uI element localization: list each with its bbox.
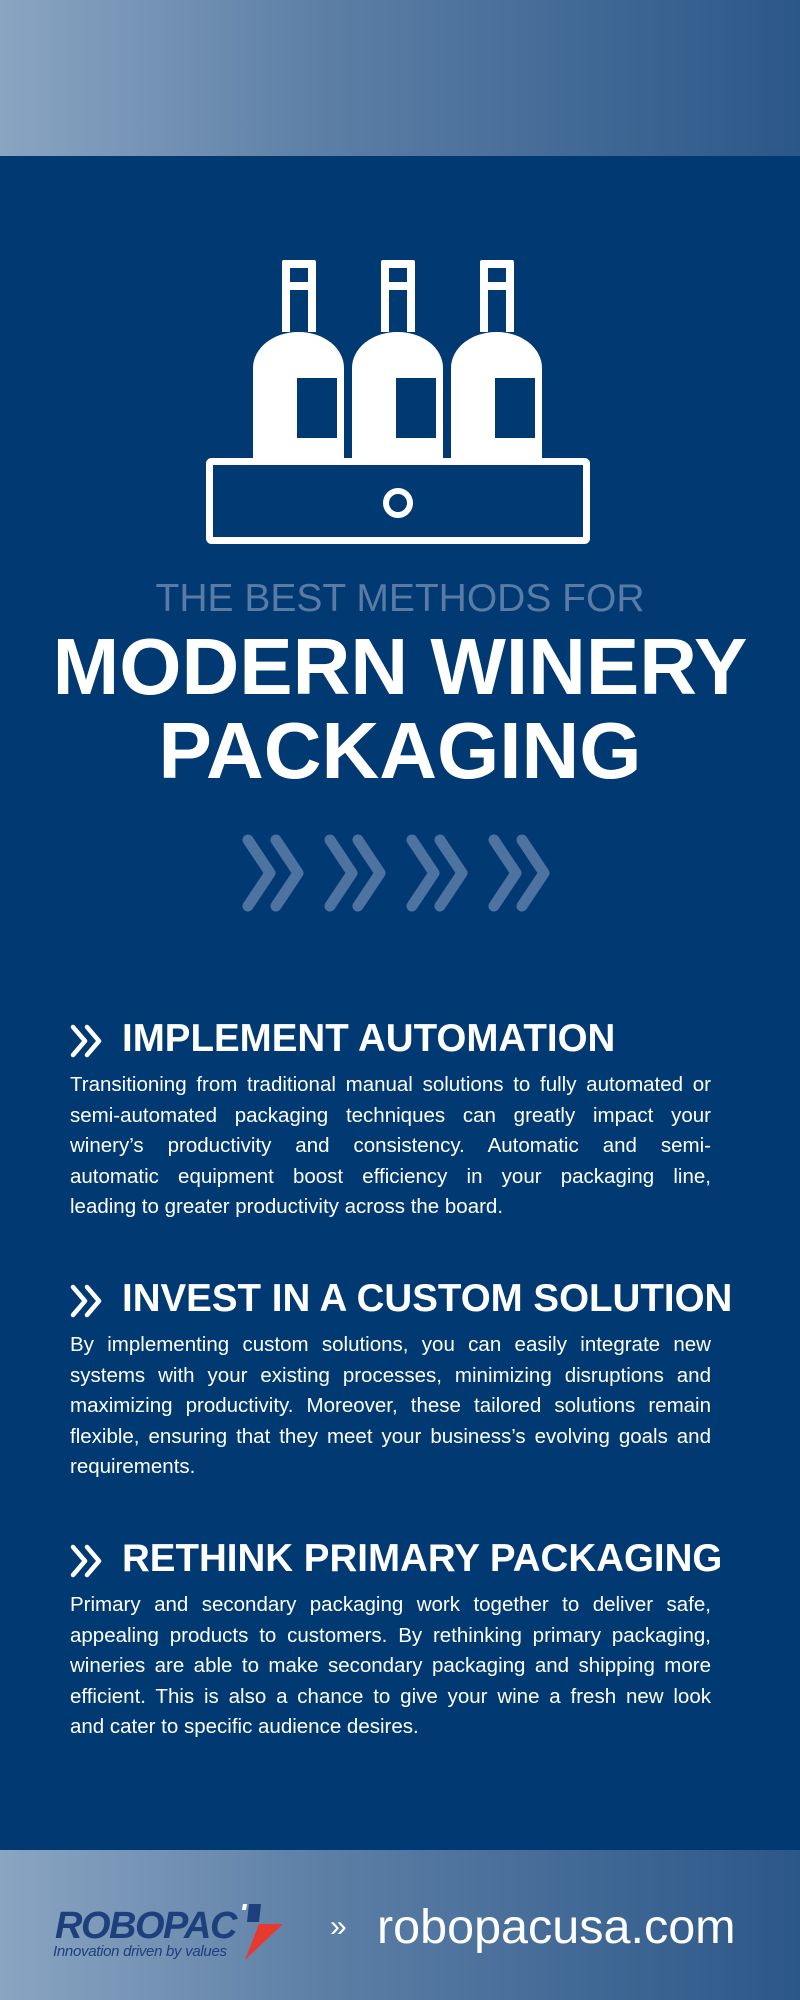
section 2 text: requirements. bbox=[70, 1455, 195, 1478]
header band bbox=[0, 0, 800, 156]
section 3 text: and cater to specific audience desires. bbox=[70, 1715, 419, 1738]
section 1 text: automatic equipment boost efficiency in your packaging line, bbox=[70, 1164, 711, 1188]
section 3 text: Primary and secondary packaging work together to deliver safe, bbox=[70, 1593, 711, 1616]
section 2 text: maximizing productivity. Moreover, these tailored solutions remain bbox=[70, 1394, 711, 1417]
website link: » bbox=[330, 1910, 347, 1943]
section 3 text: wineries are able to make secondary packaging and shipping more bbox=[70, 1654, 711, 1677]
section 3 text: efficient. This is also a chance to give your wine a fresh new look bbox=[70, 1684, 711, 1708]
section 2 heading: INVEST IN A CUSTOM SOLUTION bbox=[122, 1277, 732, 1320]
footer band bbox=[0, 1850, 800, 2000]
section 1 text: leading to greater productivity across the board. bbox=[70, 1195, 503, 1218]
logo: ROBOPAC: Innovation driven by values bbox=[53, 1943, 227, 1960]
icon: wine bottles in crate bbox=[206, 260, 590, 544]
subtitle: THE BEST METHODS FOR bbox=[156, 577, 644, 620]
logo: ROBOPAC: ROBOPAC bbox=[55, 1905, 236, 1947]
section 3 heading: RETHINK PRIMARY PACKAGING bbox=[122, 1537, 722, 1580]
footer band: robopacusa.com bbox=[377, 1900, 736, 1954]
section 1 text: winery’s productivity and consistency. Automatic and semi- bbox=[70, 1134, 711, 1157]
title: PACKAGING bbox=[159, 706, 641, 795]
logo: ROBOPAC bbox=[53, 1904, 283, 1960]
section 2 text: flexible, ensuring that they meet your business’s evolving goals and bbox=[70, 1424, 711, 1448]
chevrons decoration bbox=[242, 834, 550, 912]
section 1 text bbox=[70, 1073, 711, 1218]
section 1 text: Transitioning from traditional manual solutions to fully automated or bbox=[70, 1073, 711, 1096]
title: MODERN WINERY bbox=[53, 622, 747, 711]
section 1 heading: IMPLEMENT AUTOMATION bbox=[122, 1017, 615, 1060]
section 2 text: By implementing custom solutions, you can easily integrate new bbox=[70, 1333, 711, 1356]
title bbox=[53, 622, 747, 795]
section 3 text: appealing products to customers. By rethinking primary packaging, bbox=[70, 1624, 711, 1646]
section 2 text: systems with your existing processes, minimizing disruptions and bbox=[70, 1364, 711, 1386]
section 3 text bbox=[70, 1593, 711, 1738]
section 1 text: semi-automated packaging techniques can greatly impact your bbox=[70, 1104, 711, 1126]
section 2 text bbox=[70, 1333, 711, 1478]
